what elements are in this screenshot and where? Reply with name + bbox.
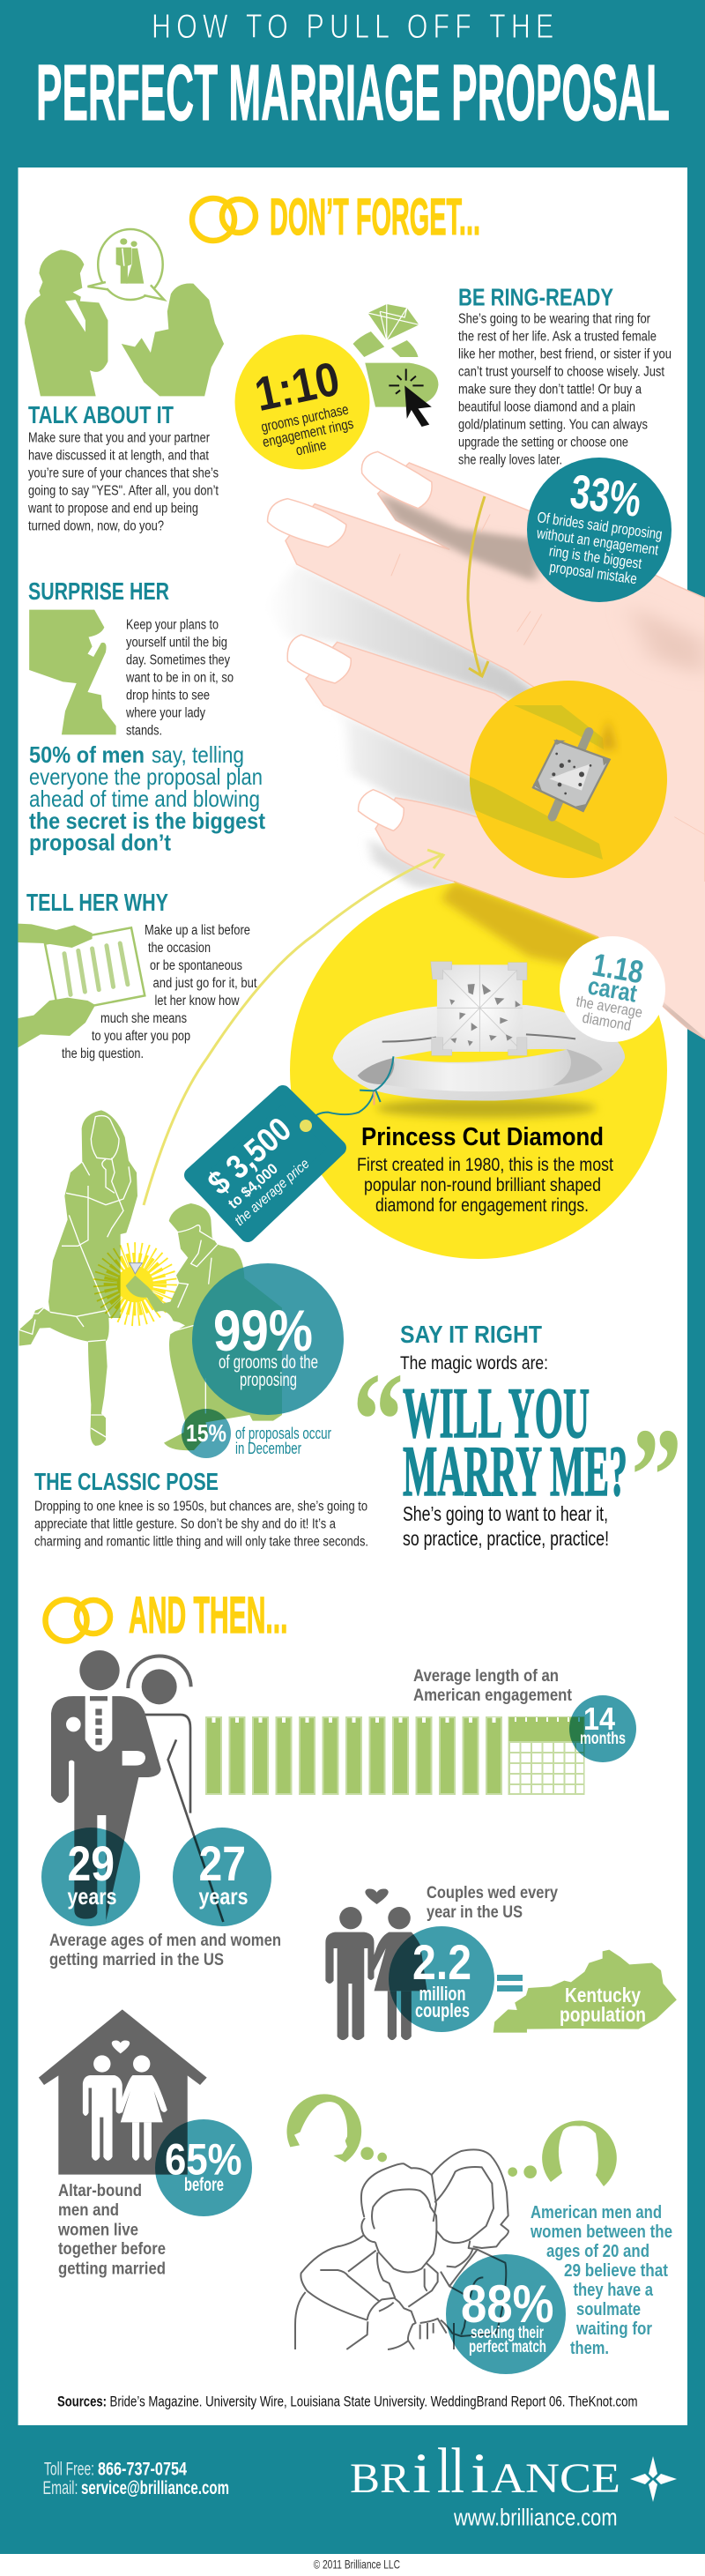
logo: brilliance (350, 2435, 677, 2531)
caption: soulmate (530, 2202, 672, 2358)
princess cut description (357, 1123, 613, 1216)
stat: 27 years (173, 1828, 271, 1926)
illustration: bride and groom pictogram (51, 1650, 223, 1922)
fingernails (268, 451, 432, 830)
caption: altar-bound: getting married (58, 2259, 166, 2278)
caption: soulmate: American men and (531, 2202, 662, 2222)
callout: 33% of brides: proposal mistake (548, 559, 638, 587)
stat: 29 years: 29 (67, 1835, 115, 1891)
caption: soulmate: women between the (530, 2222, 672, 2242)
icon: shushing face (29, 610, 116, 734)
panel: talk about it: going to say "YES". After all, you don’t (28, 484, 219, 499)
icon: house with couple (39, 2009, 207, 2175)
callout: 99% of grooms: 99% (213, 1298, 313, 1363)
callout: 1.18 carat: 1.18 (590, 946, 646, 990)
stat: 14 months: months (580, 1730, 626, 1748)
stat: 29 years: years (67, 1883, 116, 1910)
panel: be ring-ready: make sure they don’t tattle! Or buy a (458, 383, 642, 398)
panel: say it right: The magic words are: (400, 1353, 548, 1374)
woman standing (19, 1110, 137, 1446)
icon: thought head right (508, 2121, 617, 2186)
stat: 50% of men: say, telling (152, 741, 244, 768)
stat: 14 months (569, 1695, 636, 1762)
caption: altar-bound: women live (57, 2220, 138, 2239)
caption: soulmate: waiting for (575, 2319, 652, 2339)
panel: tell her why: the big question. (62, 1046, 144, 1061)
chart: months calendar strip (206, 1716, 585, 1795)
stat: 50% of men: ahead of time and blowing (29, 785, 260, 812)
panel: the classic pose: THE CLASSIC POSE (34, 1468, 219, 1495)
yellow circle on ring finger (467, 681, 667, 878)
close quote: ” (631, 1400, 682, 1552)
icon: wedding rings (192, 198, 256, 241)
icon: logo ornament (630, 2456, 677, 2502)
copyright: © 2011 Brilliance LLC (314, 2557, 400, 2572)
stat: 27 years: 27 (199, 1835, 246, 1891)
callout: 33% of brides: 33% (568, 465, 644, 527)
price tag: the average price (232, 1157, 313, 1229)
callout: 1:10 grooms: grooms purchase (260, 401, 350, 436)
shadows on fingers (378, 494, 705, 1039)
callout: 33% of brides (527, 458, 672, 602)
illustration: embracing couple with soulmate thoughts (286, 2094, 617, 2349)
stat: 29 years (41, 1828, 140, 1926)
panel: talk about it: have discussed it at length, and that (28, 449, 210, 464)
caption: soulmate: they have a (573, 2280, 653, 2300)
panel: tell her why: and just go for it, but (153, 976, 257, 991)
caption: altar-bound (57, 2181, 166, 2278)
title line 1: HOW TO PULL OFF THE (152, 7, 553, 46)
callout: 33% of brides: ring is the biggest (548, 542, 643, 572)
panel: talk about it: you’re sure of your chances that she’s (28, 466, 219, 481)
panel: surprise her: day. Sometimes they (126, 652, 230, 667)
stat: 2.2 million couples: couples (415, 1999, 470, 2021)
line art couple (295, 2149, 508, 2349)
footer contact: Email: (42, 2478, 78, 2498)
stat: 2.2 million couples: 2.2 (412, 1934, 471, 1990)
callout: 15% of proposals (182, 1409, 331, 1458)
callout: 1:10 grooms: online (294, 437, 328, 458)
icon: full calendar month (508, 1716, 585, 1795)
callout: 15% of proposals: in December (235, 1440, 301, 1457)
panel: the classic pose: Dropping to one knee is so 1950s, but chances are, she’s going to (34, 1499, 367, 1514)
panel: tell her why: much she means (100, 1011, 187, 1026)
callout: 1:10 grooms (234, 335, 370, 469)
callout: 33% of brides: Of brides said proposing (536, 509, 664, 543)
stat: 88% seeking perfect match (446, 2254, 566, 2374)
stat: 2.2 million couples (389, 1926, 494, 2032)
caption: soulmate: them. (570, 2338, 609, 2358)
caption: couples wed: Couples wed every (427, 1883, 558, 1902)
footer contact: Toll Free: (44, 2460, 94, 2480)
footer contact: service@brilliance.com (81, 2478, 229, 2498)
caption: couples wed (427, 1883, 558, 1922)
price tag: $ 3,500 (201, 1111, 299, 1202)
stat: 2.2 million couples: million (419, 1983, 465, 2005)
footer contact: 866-737-0754 (98, 2460, 187, 2480)
panel: surprise her (28, 577, 265, 855)
callout: 1:10 grooms: 1:10 (250, 352, 344, 421)
icon: ring sunburst (106, 1254, 165, 1314)
callout: 1.18 carat: the average (575, 993, 644, 1021)
panel: the classic pose: appreciate that little gesture. So don’t be shy and do it! It’s a (34, 1516, 336, 1531)
icon: thought head left (286, 2094, 387, 2163)
illustration: proposal couple (19, 1110, 282, 1450)
panel: talk about it: TALK ABOUT IT (28, 401, 174, 428)
stat: 50% of men: 50% of men (29, 741, 145, 768)
panel: be ring-ready (458, 284, 672, 468)
equals sign (497, 1975, 523, 1992)
stat: 88% seeking perfect match: perfect match (469, 2338, 546, 2356)
princess cut description: First created in 1980, this is the most (357, 1155, 613, 1175)
icon: couple pictogram with heart (325, 1888, 427, 2040)
callout: 15% of proposals: 15% (186, 1419, 226, 1447)
icon: ring box with cursor (353, 304, 438, 427)
panel: be ring-ready: like her mother, best friend, or sister if you (458, 347, 672, 362)
logo: brilliance: www.brilliance.com (453, 2505, 617, 2531)
icon: wedding rings (46, 1599, 110, 1642)
panel: be ring-ready: she really loves later. (458, 453, 562, 468)
illustration: princess cut ring (312, 962, 625, 1120)
logo: brilliance: i (471, 2442, 489, 2505)
logo: brilliance: ANCE (491, 2455, 620, 2502)
panel: be ring-ready: can’t trust yourself to choose wisely. Just (458, 365, 665, 380)
panel: talk about it (25, 229, 224, 534)
panel: surprise her: drop hints to see (126, 688, 210, 703)
caption: couples wed: year in the US (427, 1902, 523, 1922)
panel: be ring-ready: the rest of her life. Ask a trusted female (458, 330, 657, 345)
icon: speech bubble (87, 229, 164, 300)
icon: hands holding list (18, 924, 145, 1047)
stat: 65% before: before (184, 2175, 224, 2195)
arrow: from ring-ready to ring (468, 496, 488, 676)
panel: talk about it: turned down, now, do you? (28, 519, 164, 534)
panel: surprise her: SURPRISE HER (28, 577, 169, 605)
hand silhouette (286, 463, 705, 1039)
callout: 33% of brides: without an engagement (535, 525, 659, 558)
panel: tell her why: TELL HER WHY (26, 889, 168, 916)
logo: brilliance: BR (350, 2455, 410, 2502)
callout: 1:10 grooms: engagement rings (261, 416, 355, 450)
princess cut description: popular non-round brilliant shaped (364, 1175, 601, 1195)
caption: soulmate: ages of 20 and (546, 2241, 649, 2261)
panel: be ring-ready: upgrade the setting or choose one (458, 436, 628, 450)
panel: surprise her: yourself until the big (126, 635, 227, 650)
panel: the classic pose (34, 1468, 368, 1549)
panel: be ring-ready: She’s going to be wearing that ring for (458, 312, 650, 327)
callout: 1.18 carat (560, 936, 665, 1042)
princess cut diamond (431, 962, 527, 1055)
panel: talk about it: Make sure that you and your partner (28, 431, 210, 446)
callout: 99% of grooms (192, 1263, 344, 1415)
map: kentucky: population (560, 2003, 646, 2026)
panel: say it right: SAY IT RIGHT (400, 1321, 542, 1348)
ring on finger (533, 732, 611, 817)
callout: 1.18 carat: diamond (581, 1009, 633, 1034)
caption: soulmate: 29 believe that (564, 2260, 668, 2281)
stat: 88% seeking perfect match: 88% (461, 2274, 553, 2334)
stat: 88% seeking perfect match: seeking their (471, 2324, 544, 2342)
large yellow circle behind ring (290, 882, 705, 1259)
price tag (192, 1093, 338, 1234)
callout: 1.18 carat: carat (586, 972, 639, 1008)
section heading: don't forget (192, 189, 480, 246)
princess cut description: diamond for engagement rings. (375, 1195, 589, 1216)
price tag: to $4,000 (225, 1160, 281, 1212)
illustration: hand with fingers (265, 451, 705, 1039)
princess cut description: Princess Cut Diamond (361, 1123, 604, 1151)
panel: tell her why (18, 889, 257, 1061)
caption: altar-bound: Altar-bound (58, 2181, 142, 2200)
caption: altar-bound: men and (58, 2200, 119, 2220)
stat: 65% before: 65% (165, 2135, 241, 2185)
stat: 50% of men: everyone the proposal plan (29, 763, 263, 790)
panel: the classic pose: charming and romantic little thing and will only take three seconds. (34, 1534, 368, 1549)
panel: tell her why: to you after you pop (92, 1029, 190, 1044)
panel: tell her why: the occasion (148, 941, 211, 956)
caption: engagement length (413, 1666, 572, 1705)
panel: be ring-ready: BE RING-READY (458, 284, 613, 311)
panel: be ring-ready: beautiful loose diamond and a plain (458, 400, 635, 415)
sources: Sources: (57, 2394, 107, 2410)
caption: engagement length: Average length of an (413, 1666, 559, 1686)
caption: average ages (49, 1931, 281, 1969)
section heading: and then (46, 1587, 287, 1644)
callout: 15% of proposals: of proposals occur (235, 1425, 331, 1442)
tag string (312, 1056, 393, 1120)
panel: say it right: She’s going to want to hear it, (403, 1502, 608, 1525)
man kneeling (126, 1203, 282, 1450)
finger crease marks (391, 514, 705, 835)
footer contact (42, 2460, 229, 2498)
hand cast shadows (265, 564, 603, 890)
panel: surprise her: Keep your plans to (126, 617, 219, 632)
stat: 14 months: 14 (583, 1701, 615, 1737)
stat: 50% of men: proposal don’t (29, 829, 171, 855)
stat: 50% of men: the secret is the biggest (29, 808, 265, 834)
panel: talk about it: want to propose and end up being (27, 502, 198, 517)
panel: tell her why: let her know how (155, 994, 240, 1009)
map: kentucky: Kentucky (565, 1984, 641, 2006)
arrow: from classic pose to ring (144, 850, 443, 1205)
callout: 99% of grooms: proposing (240, 1370, 297, 1390)
callout: 99% of grooms: of grooms do the (219, 1352, 318, 1373)
ring band (333, 1005, 625, 1101)
panel: surprise her: where your lady (125, 705, 205, 720)
icon: couple talking (25, 229, 224, 396)
panel: say it right: so practice, practice, practice! (403, 1527, 609, 1550)
stat: 65% before (155, 2119, 252, 2216)
caption: average ages: getting married in the US (49, 1950, 224, 1969)
open quote: “ (352, 1344, 404, 1496)
text: DON’T FORGET... (270, 189, 480, 246)
panel: be ring-ready: gold/platinum setting. You can always (458, 418, 648, 433)
panel: surprise her: want to be in on it, so (125, 670, 234, 685)
logo: brilliance: ll (437, 2435, 464, 2506)
panel: surprise her: stands. (126, 723, 162, 738)
caption: average ages: Average ages of men and women (49, 1931, 281, 1950)
will you marry me (403, 1373, 627, 1511)
stat: 50% of men (29, 741, 265, 855)
caption: altar-bound: together before (58, 2239, 166, 2259)
panel: tell her why: or be spontaneous (150, 958, 242, 973)
map: kentucky (494, 1950, 677, 2033)
panel: say it right (352, 1321, 682, 1552)
logo: brilliance: i (412, 2442, 431, 2505)
caption: soulmate: soulmate (576, 2299, 641, 2319)
panel: tell her why: Make up a list before (145, 923, 250, 938)
stat: 27 years: years (199, 1883, 249, 1910)
section heading: and then: AND THEN... (129, 1587, 287, 1644)
caption: engagement length: American engagement (413, 1686, 572, 1705)
